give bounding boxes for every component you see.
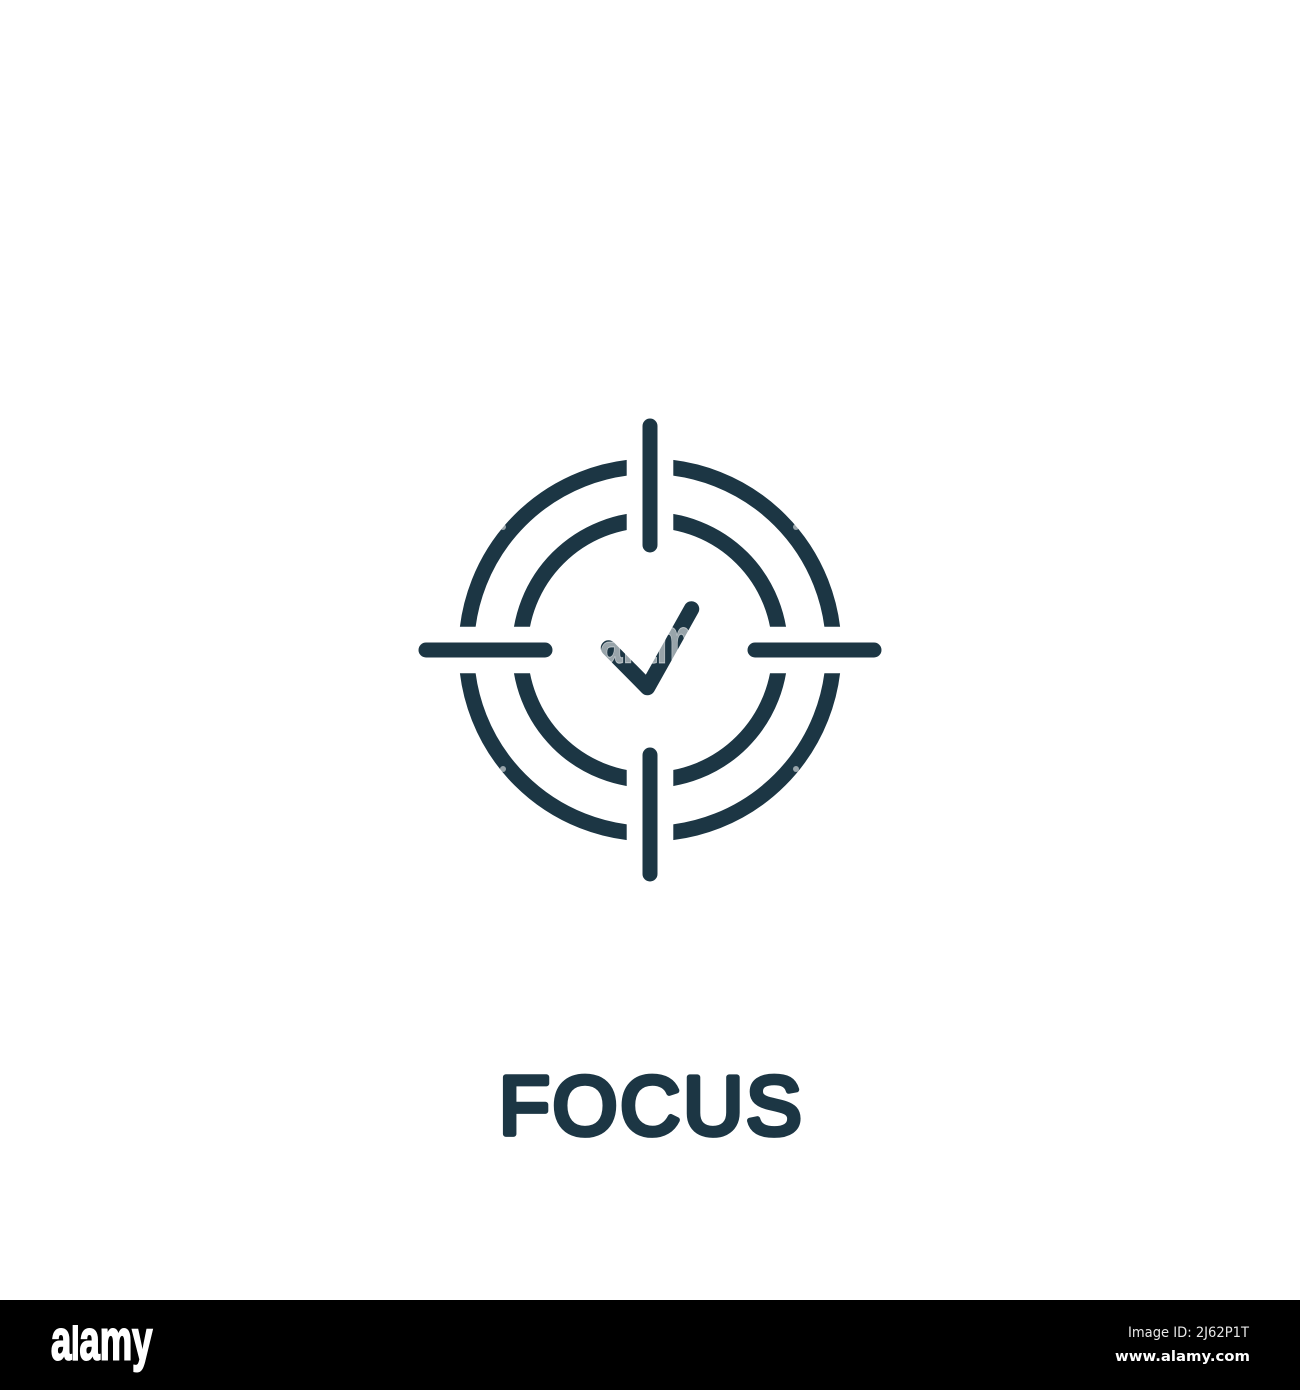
watermark over check mark: alamy bbox=[600, 603, 715, 677]
icon: focus target with check mark bbox=[426, 426, 874, 874]
website url: www.alamy.com bbox=[1115, 1349, 1250, 1365]
title: FOCUS: FOCUS bbox=[499, 1059, 804, 1152]
outer ring bbox=[466, 466, 834, 834]
footer logo: alamy: alamy bbox=[51, 1309, 153, 1373]
footer bar bbox=[0, 1300, 1300, 1390]
watermark flecks on outer ring bbox=[500, 524, 799, 772]
crosshair lines bbox=[426, 426, 874, 874]
image id: Image ID: 2J62P1T bbox=[1128, 1325, 1249, 1341]
check mark bbox=[608, 609, 692, 688]
inner ring bbox=[520, 520, 780, 780]
